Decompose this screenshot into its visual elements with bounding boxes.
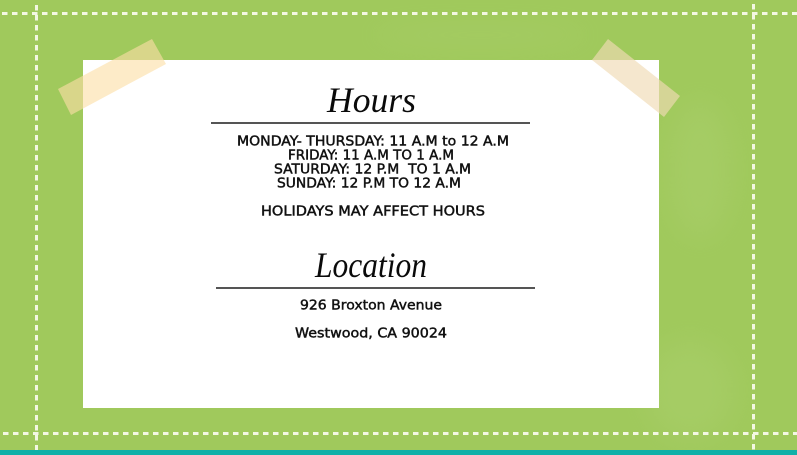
text block: opening hours: SATURDAY: 12 P.M TO 1 A.M: [274, 162, 471, 178]
tape: top right: [592, 39, 680, 117]
chalky background texture: [370, 25, 735, 440]
text block: opening hours: [237, 134, 509, 192]
text block: opening hours: FRIDAY: 11 A.M TO 1 A.M: [288, 148, 454, 164]
heading: Hours: Hours: [326, 80, 416, 120]
hours divider: [211, 122, 530, 124]
text block: city and zip: Westwood, CA 90024: [295, 326, 447, 342]
text block: holiday note: HOLIDAYS MAY AFFECT HOURS: [261, 204, 485, 220]
white card: [83, 60, 659, 408]
text block: opening hours: MONDAY- THURSDAY: 11 A.M to 12 A.M: [237, 134, 509, 150]
heading: Location: Location: [314, 245, 427, 285]
text block: street address: 926 Broxton Avenue: [300, 298, 442, 314]
text block: opening hours: SUNDAY: 12 P.M TO 12 A.M: [277, 176, 461, 192]
teal bottom bar: [0, 450, 797, 455]
location divider: [216, 287, 535, 289]
tape: top left: [58, 39, 166, 115]
